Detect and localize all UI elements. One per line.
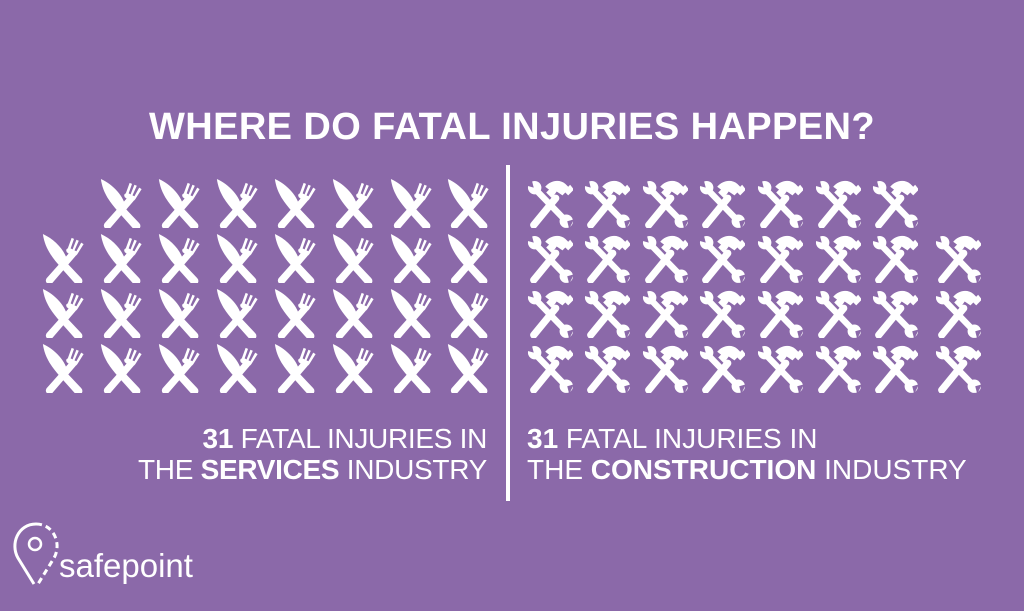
text: services caption: THE SERVICES INDUSTRY — [138, 454, 487, 485]
text: services caption — [138, 423, 487, 485]
logo: safepoint — [13, 522, 193, 585]
text: construction caption: 31 FATAL INJURIES IN — [527, 423, 817, 454]
text: construction caption — [527, 423, 967, 485]
title: WHERE DO FATAL INJURIES HAPPEN? — [149, 106, 875, 148]
icon: location pin — [13, 522, 59, 585]
text: construction caption: THE CONSTRUCTION INDUSTRY — [527, 454, 967, 485]
panel: services icons — [42, 179, 488, 393]
panel: construction icons — [528, 180, 981, 393]
text: services caption: 31 FATAL INJURIES IN — [203, 423, 487, 454]
logo: safepoint: safepoint — [59, 547, 193, 584]
